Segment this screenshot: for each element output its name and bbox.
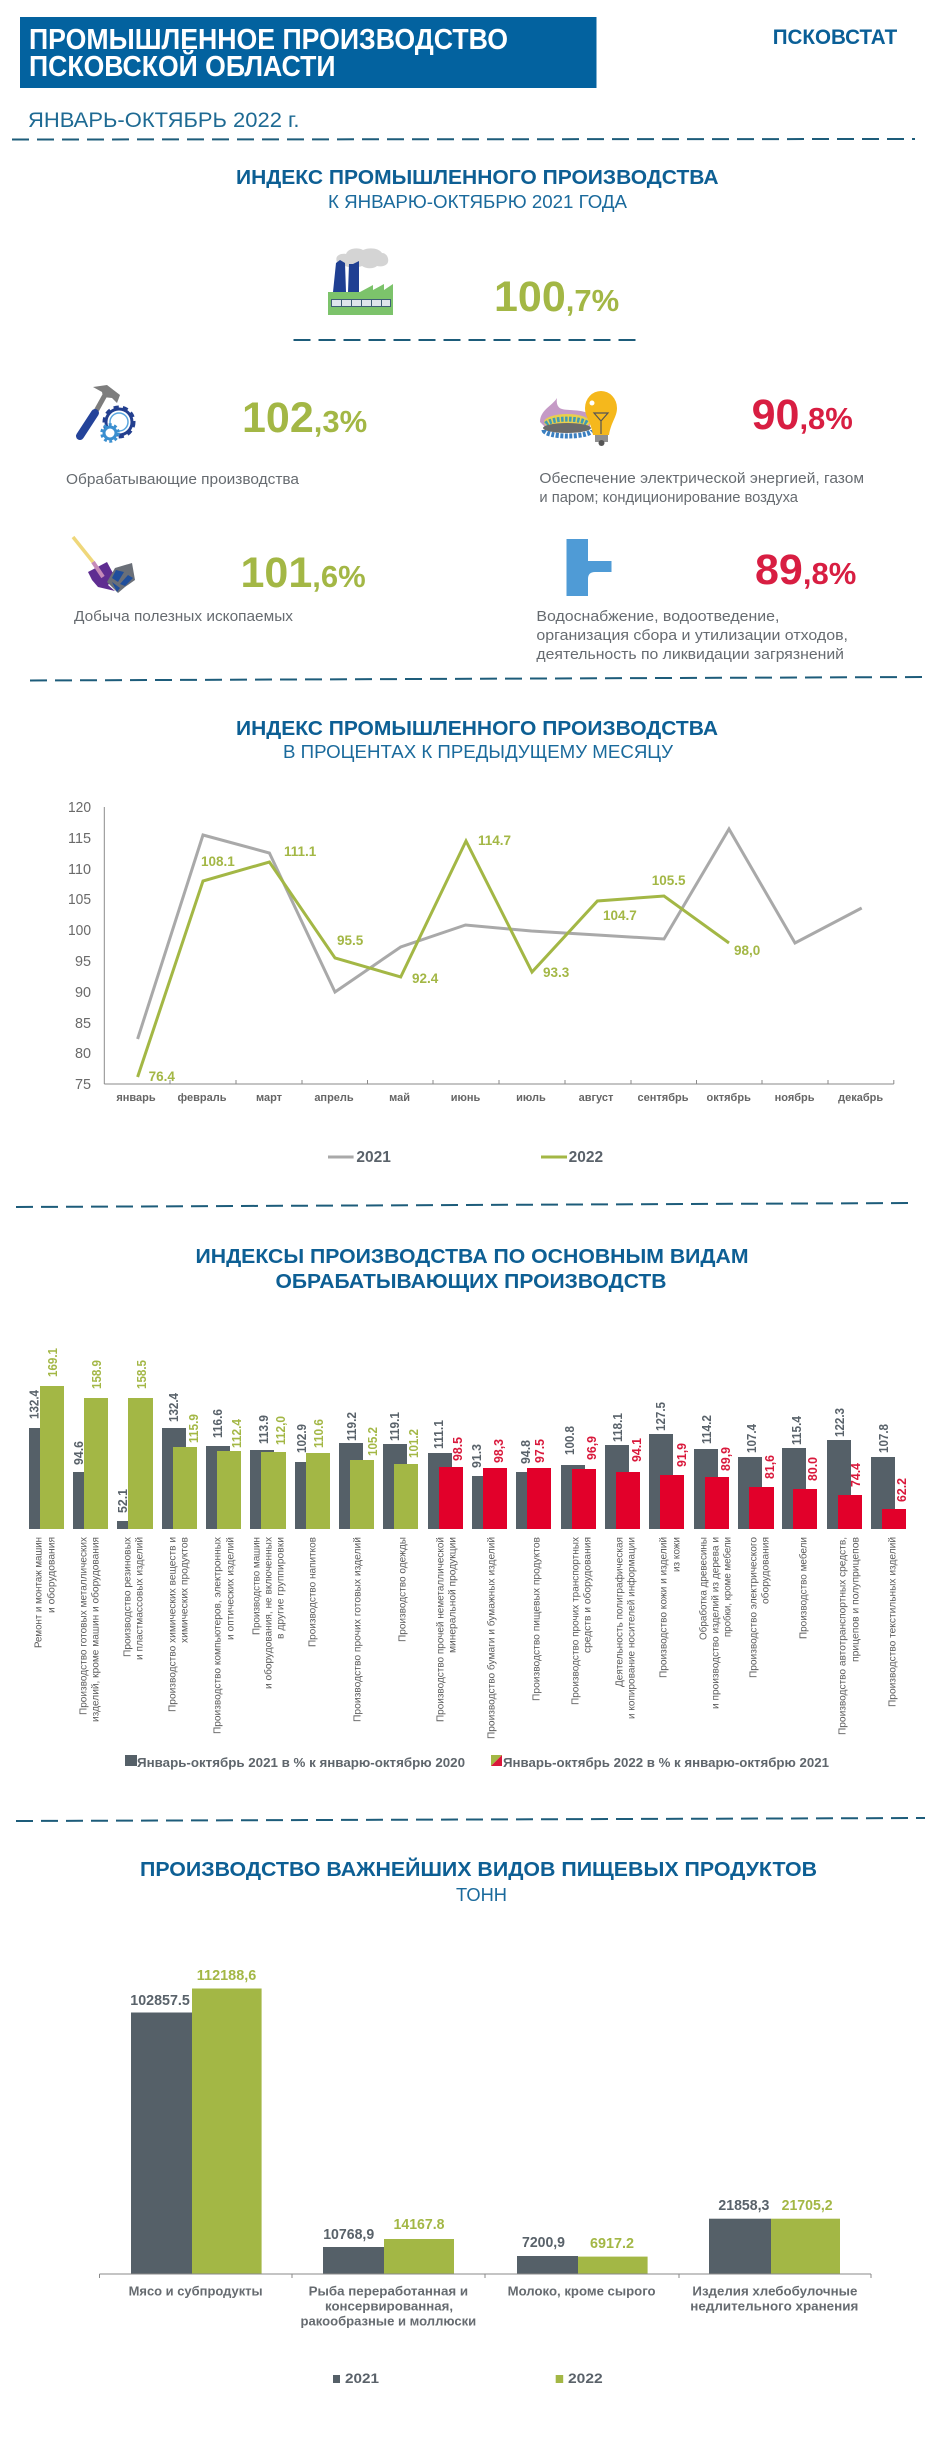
title banner: ПРОМЫШЛЕННОЕ ПРОИЗВОДСТВО — [29, 24, 508, 56]
panel: sectors — [66, 385, 864, 663]
bar labels: 2021: 113.9 — [256, 1415, 271, 1444]
value labels: food: 7200,9 — [522, 2235, 565, 2251]
category labels: Производство прочих готовых изделий — [352, 1537, 364, 1722]
category labels — [34, 1537, 898, 1739]
bar labels: 2022: 169.1 — [45, 1348, 60, 1377]
bar labels: 2021: 119.2 — [344, 1412, 359, 1441]
bar labels: 2022 — [45, 1348, 909, 1502]
category labels: химических продуктов — [180, 1537, 190, 1643]
legend: food chart: 2022 — [568, 2370, 603, 2386]
panel: food production — [100, 1857, 871, 2386]
data labels: 2022: 114.7 — [478, 833, 511, 848]
bar labels: 2022: 112,0 — [273, 1416, 288, 1445]
bar chart: dark series 2021 — [29, 1428, 895, 1529]
label: water: деятельность по ликвидации загрязнений — [536, 646, 844, 663]
value labels: food: 14167.8 — [394, 2217, 444, 2233]
heading: food production — [140, 1857, 817, 1905]
bar labels: 2022: 91,9 — [674, 1443, 689, 1467]
category labels: оборудования — [760, 1537, 772, 1604]
sector: mining — [73, 537, 366, 625]
heading: monthly index: В ПРОЦЕНТАХ К ПРЕДЫДУЩЕМУ МЕСЯЦУ — [283, 742, 674, 762]
bar labels: 2022: 80.0 — [805, 1457, 820, 1481]
line chart: 100 — [68, 922, 91, 939]
category labels: изделий, кроме машин и оборудования — [90, 1537, 102, 1722]
organisation name: ПСКОВСТАТ — [773, 26, 897, 49]
label: water: организация сбора и утилизации отходов, — [536, 627, 848, 644]
line chart: апрель — [314, 1092, 354, 1104]
label: energy: и паром; кондиционирование воздуха — [539, 489, 799, 506]
category labels: Производство одежды — [398, 1537, 408, 1642]
bar labels: 2021: 102.9 — [294, 1424, 309, 1453]
line chart: 120 — [68, 799, 91, 816]
category labels: и оборудования — [46, 1537, 58, 1613]
data labels: 2022: 104.7 — [603, 908, 637, 923]
value labels: food: 21705,2 — [782, 2198, 833, 2214]
category labels: минеральной продукции — [448, 1537, 458, 1653]
category labels: и пластмассовых изделий — [134, 1537, 146, 1660]
bar labels: 2022: 158.5 — [134, 1360, 149, 1389]
bar labels: 2022: 115.9 — [186, 1414, 201, 1443]
bar labels: 2021: 114.2 — [699, 1415, 714, 1444]
category labels: Производство текстильных изделий — [888, 1537, 898, 1707]
panel: manufacturing indices — [26, 1246, 909, 1770]
value labels: food: 6917.2 — [590, 2236, 634, 2252]
value: water: 89,8% — [755, 546, 856, 594]
panel: monthly index — [68, 718, 894, 1166]
value: energy: 90,8% — [752, 391, 853, 439]
value: total index: 100,7% — [494, 273, 619, 321]
category labels: Производство компьютеров, электронных — [212, 1537, 224, 1734]
bar labels: 2022: 81,6 — [762, 1455, 777, 1479]
category labels: Ремонт и монтаж машин — [34, 1537, 44, 1648]
category labels: Производство прочей неметаллической — [436, 1537, 446, 1722]
category labels: food — [129, 2284, 858, 2328]
header panel — [20, 17, 897, 132]
label: mining: Добыча полезных ископаемых — [74, 608, 294, 625]
icon: shovel and ore — [73, 537, 135, 593]
bar labels: 2022: 105.2 — [365, 1427, 380, 1456]
legend: manufacturing chart: Январь-октябрь 2022 в % к январю-октябрю 2021 — [503, 1755, 829, 1770]
category labels: и копирование носителей информации — [626, 1537, 638, 1719]
legend: manufacturing chart — [125, 1755, 829, 1770]
line chart: август — [579, 1092, 614, 1104]
bar labels: 2021: 132.4 — [166, 1392, 181, 1422]
value labels: food — [130, 1968, 833, 2252]
category labels: Производство химических веществ и — [168, 1537, 178, 1712]
label: water — [536, 608, 848, 663]
category labels: Производство автотранспортных средств, — [838, 1537, 848, 1735]
value: manufacturing: 102,3% — [242, 394, 367, 442]
bar labels: 2021: 115.4 — [789, 1415, 804, 1445]
line chart: 95 — [75, 953, 91, 970]
data labels: 2022: 93.3 — [543, 965, 570, 980]
bar labels: 2021: 122.3 — [832, 1408, 847, 1437]
line chart — [68, 799, 894, 1104]
bar labels: 2021: 118.1 — [610, 1413, 625, 1442]
icon: gas burner and bulb — [540, 391, 617, 446]
bar labels: 2022: 94.1 — [629, 1438, 644, 1462]
bar labels: 2022: 74.4 — [848, 1462, 863, 1487]
category labels: и производство изделий из дерева и — [710, 1537, 722, 1709]
data labels: 2022: 95.5 — [337, 933, 364, 948]
line chart: июнь — [451, 1092, 481, 1104]
heading: monthly index — [236, 718, 718, 762]
category labels: Производство прочих транспортных — [570, 1537, 582, 1705]
bar labels: 2022: 96,9 — [584, 1436, 599, 1460]
value labels: food: 112188,6 — [197, 1968, 256, 1984]
category labels: и оборудования, не включенных — [262, 1537, 274, 1689]
line chart: февраль — [178, 1092, 227, 1104]
category labels: в другие группировки — [276, 1537, 286, 1639]
line chart: декабрь — [838, 1092, 883, 1104]
legend: monthly chart: 2022 — [569, 1149, 603, 1166]
line: 2022 — [138, 841, 729, 1077]
value: mining: 101,6% — [240, 549, 366, 597]
bar labels: 2022: 98,3 — [491, 1439, 506, 1463]
data labels: 2022: 111.1 — [284, 844, 317, 859]
value labels: food: 10768,9 — [323, 2227, 374, 2243]
bar labels: 2021: 111.1 — [431, 1420, 446, 1449]
heading: annual index: ИНДЕКС ПРОМЫШЛЕННОГО ПРОИЗВОДСТВА — [236, 167, 719, 189]
label: water: Водоснабжение, водоотведение, — [536, 608, 779, 625]
heading: food production: ТОНН — [456, 1885, 507, 1905]
bar labels: 2021: 107.4 — [744, 1423, 759, 1453]
data labels: 2022: 105.5 — [652, 873, 686, 888]
category labels: food: консервированная, — [325, 2298, 453, 2314]
line chart: июль — [516, 1092, 546, 1104]
line chart: 85 — [75, 1015, 91, 1032]
title banner: ПСКОВСКОЙ ОБЛАСТИ — [29, 49, 336, 83]
legend: manufacturing chart: Январь-октябрь 2021 в % к январю-октябрю 2020 — [137, 1755, 465, 1770]
heading: manufacturing indices: ИНДЕКСЫ ПРОИЗВОДСТВА ПО ОСНОВНЫМ ВИДАМ — [196, 1246, 748, 1268]
category labels: средств и оборудования — [582, 1537, 594, 1653]
icon: pipe — [566, 539, 612, 596]
line chart: 110 — [68, 861, 91, 878]
bar labels: 2021: 94.6 — [71, 1441, 86, 1465]
line chart: 115 — [68, 830, 91, 847]
category labels: Производство напитков — [308, 1537, 318, 1647]
bar chart: green series 2022 — [40, 1386, 418, 1529]
data labels: 2022: 76.4 — [149, 1069, 175, 1084]
label: energy: Обеспечение электрической энергией, газом — [539, 470, 864, 487]
bar labels: 2022: 110.6 — [311, 1419, 326, 1448]
category labels: Производство резиновых — [122, 1537, 134, 1657]
line: 2021 — [138, 829, 862, 1039]
heading: monthly index: ИНДЕКС ПРОМЫШЛЕННОГО ПРОИЗВОДСТВА — [236, 718, 718, 740]
legend: monthly chart: 2021 — [356, 1149, 391, 1166]
title banner — [20, 17, 596, 88]
bar labels: 2022: 97.5 — [532, 1439, 547, 1463]
bar labels: 2021: 100.8 — [562, 1426, 577, 1455]
data labels: 2022 — [149, 833, 760, 1084]
line chart: 90 — [75, 984, 91, 1001]
category labels: food: Рыба переработанная и — [309, 2284, 468, 2299]
category labels: Производство машин — [252, 1537, 262, 1635]
bar labels: 2021: 116.6 — [210, 1409, 225, 1438]
heading: manufacturing indices: ОБРАБАТЫВАЮЩИХ ПРОИЗВОДСТВ — [276, 1271, 666, 1293]
bar labels: 2021: 94.8 — [518, 1440, 533, 1464]
bar labels: 2021 — [26, 1389, 891, 1513]
bar labels: 2022: 101.2 — [406, 1429, 421, 1458]
category labels: food: недлительного хранения — [690, 2298, 858, 2314]
category labels: Производство пищевых продуктов — [532, 1537, 542, 1701]
category labels: Производство готовых металлических — [78, 1537, 90, 1715]
line chart: январь — [116, 1092, 156, 1104]
heading: manufacturing indices — [196, 1246, 748, 1293]
heading: annual index — [236, 167, 719, 212]
bar labels: 2021: 107.8 — [876, 1424, 891, 1453]
line chart: 105 — [68, 891, 91, 908]
legend: food chart: 2021 — [345, 2370, 379, 2386]
bar labels: 2022: 158.9 — [89, 1360, 104, 1389]
column chart: food — [100, 1968, 871, 2328]
value labels: food: 21858,3 — [718, 2198, 769, 2214]
bar labels: 2022: 98.5 — [450, 1437, 465, 1461]
line chart: март — [256, 1092, 283, 1104]
category labels: Производство мебели — [798, 1537, 810, 1639]
bar labels: 2021: 132.4 — [26, 1389, 42, 1419]
value labels: food: 102857.5 — [130, 1993, 190, 2009]
data labels: 2022: 98,0 — [734, 943, 760, 958]
period: ЯНВАРЬ-ОКТЯБРЬ 2022 г. — [28, 109, 300, 132]
category labels: food: Молоко, кроме сырого — [508, 2284, 656, 2299]
heading: annual index: К ЯНВАРЮ-ОКТЯБРЮ 2021 ГОДА — [328, 192, 627, 212]
category labels: из кожи — [672, 1537, 682, 1572]
category labels: Производство кожи и изделий — [658, 1537, 670, 1678]
label: manufacturing: Обрабатывающие производства — [66, 471, 300, 488]
category labels: прицепов и полуприцепов — [850, 1537, 862, 1662]
panel: annual index — [236, 167, 719, 321]
category labels: Производство бумаги и бумажных изделий — [486, 1537, 498, 1739]
category labels: Деятельность полиграфическая — [614, 1537, 626, 1687]
category labels: и оптических изделий — [226, 1537, 236, 1640]
category labels: Производство электрического — [748, 1537, 760, 1678]
line chart: октябрь — [707, 1092, 751, 1104]
category labels: пробки, кроме мебели — [722, 1537, 734, 1637]
line chart: сентябрь — [638, 1092, 689, 1104]
category labels: food: ракообразные и моллюски — [300, 2314, 476, 2328]
bar labels: 2021: 127.5 — [653, 1402, 668, 1431]
category labels: food: Изделия хлебобулочные — [692, 2284, 857, 2299]
bar chart: red series 2022 — [439, 1467, 906, 1529]
bar labels: 2022: 89,9 — [718, 1447, 733, 1471]
heading: food production: ПРОИЗВОДСТВО ВАЖНЕЙШИХ ВИДОВ ПИЩЕВЫХ ПРОДУКТОВ — [140, 1857, 817, 1881]
legend: monthly chart — [328, 1149, 603, 1166]
icon: factory — [328, 248, 393, 315]
data labels: 2022: 92.4 — [412, 971, 439, 986]
bar labels: 2021: 52.1 — [115, 1489, 130, 1513]
line chart: ноябрь — [775, 1092, 815, 1104]
label: energy — [539, 470, 864, 506]
line chart: 80 — [75, 1045, 91, 1062]
bar labels: 2021: 119.1 — [387, 1412, 402, 1441]
icon: hammer and gear — [80, 385, 134, 442]
sector: energy — [539, 391, 864, 506]
line chart: май — [389, 1092, 410, 1104]
sector: manufacturing — [66, 385, 367, 488]
category labels: food: Мясо и субпродукты — [129, 2284, 263, 2299]
line chart: 75 — [75, 1076, 91, 1093]
legend: food chart — [333, 2370, 603, 2386]
data labels: 2022: 108.1 — [201, 854, 235, 869]
category labels: Обработка древесины — [698, 1537, 710, 1640]
bar labels: 2022: 112.4 — [229, 1418, 244, 1448]
sector: water — [536, 539, 856, 663]
bar labels: 2022: 62.2 — [894, 1478, 909, 1502]
bar labels: 2021: 91.3 — [469, 1444, 484, 1468]
